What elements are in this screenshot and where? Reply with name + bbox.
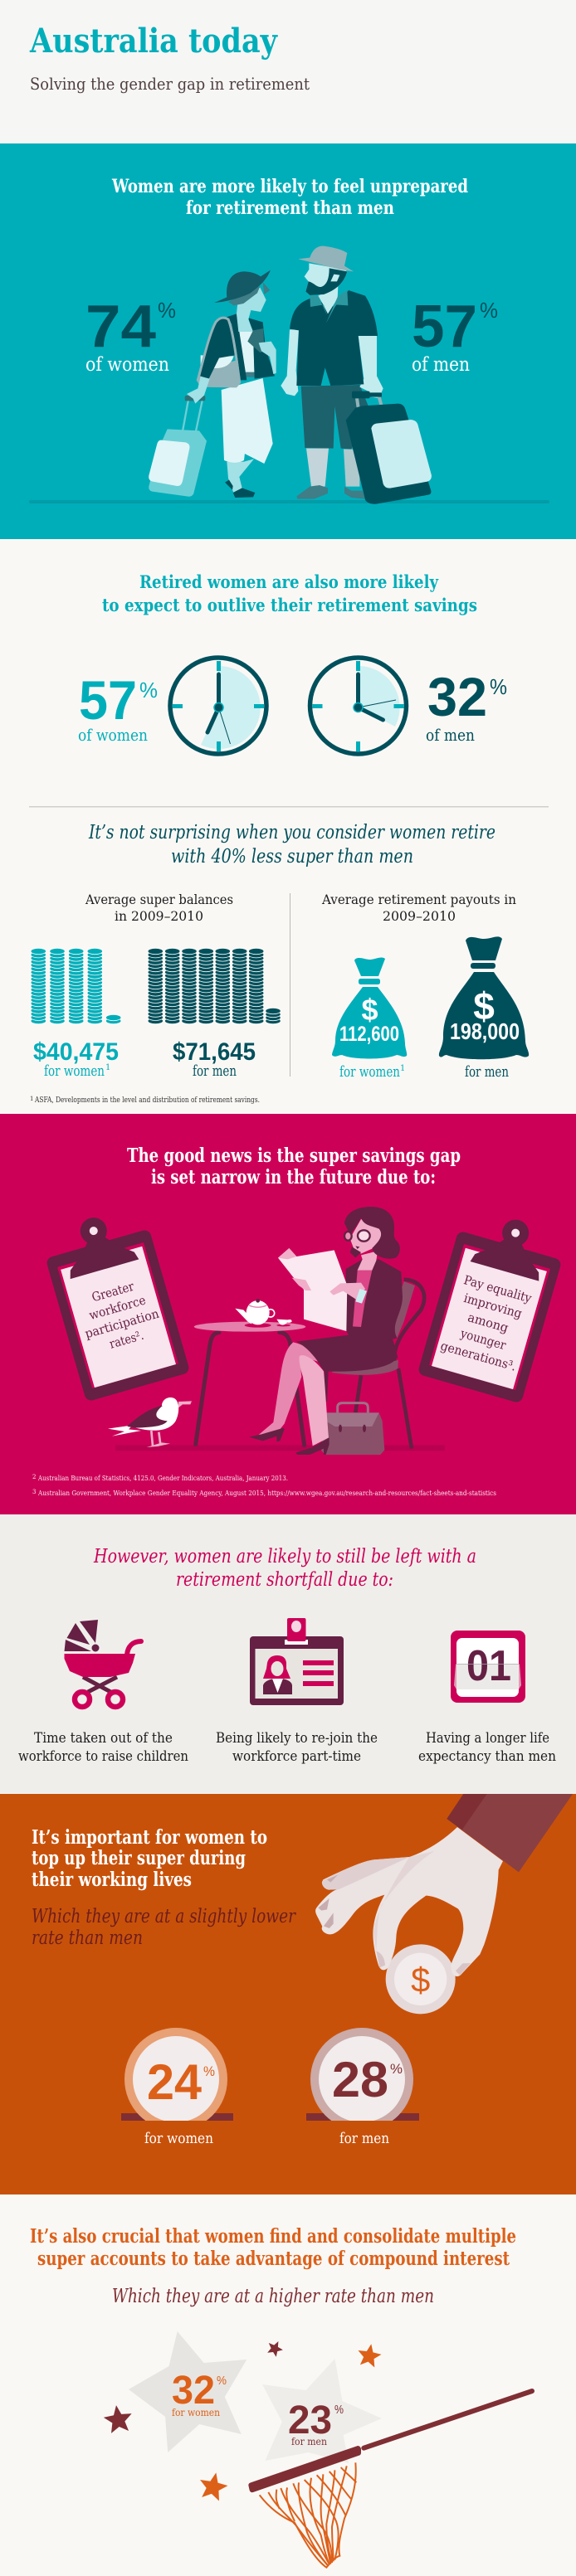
illustration: travelling couple — [149, 246, 432, 504]
heading — [30, 2225, 516, 2270]
money bag: men: 198,000 — [450, 1018, 520, 1044]
icon: ID card — [250, 1618, 344, 1705]
chart title: average super balances: Average super balances — [85, 892, 233, 907]
clipboard text: participation — [83, 1306, 161, 1341]
star: 32% for women: 32 — [172, 2369, 215, 2413]
text: raising children: workforce to raise children — [18, 1748, 188, 1765]
text: life expectancy: expectancy than men — [418, 1748, 556, 1765]
money bag: women — [332, 957, 407, 1058]
heading — [111, 176, 468, 219]
money bag: men — [439, 936, 529, 1059]
footnotes 2 and 3: 3 — [32, 1489, 36, 1495]
heading — [93, 1546, 476, 1591]
clipboard text: rates². — [108, 1328, 145, 1352]
stat: 32% of men — [426, 666, 507, 745]
icon: calendar: 01 — [466, 1642, 511, 1690]
table — [194, 1322, 305, 1446]
heading: It’s important for women to — [32, 1826, 267, 1849]
chart title: average retirement payouts — [321, 892, 516, 924]
text: part-time: Being likely to re-join the — [216, 1730, 378, 1747]
subtitle: Solving the gender gap in retirement — [30, 74, 310, 94]
coin: 28% for men: % — [390, 2061, 403, 2077]
chart title: average super balances — [85, 892, 233, 924]
coin: 24% for women: 24 — [147, 2054, 203, 2110]
man figure — [281, 246, 383, 499]
coin: 28% for men: 28 — [332, 2052, 388, 2107]
stat: 32% of men: % — [490, 674, 507, 699]
stat: $40,475 for women: for women — [44, 1062, 105, 1080]
subheading: rate than men — [32, 1927, 143, 1949]
heading — [102, 571, 477, 615]
stat: 57% of women: of women — [78, 725, 148, 745]
clock: 32% — [310, 658, 407, 754]
coin: 28% for men: for men — [339, 2130, 389, 2147]
clipboard text — [439, 1271, 537, 1374]
coin: 24% for women: % — [203, 2063, 215, 2079]
stat: 74% of women — [85, 294, 176, 376]
stat: 57% of women — [78, 669, 158, 745]
chart title: average retirement payouts: 2009–2010 — [383, 908, 456, 924]
clipboard text: Pay equality — [462, 1272, 534, 1306]
panel: retirement savings clocks — [0, 539, 576, 1114]
footnotes 2 and 3 — [32, 1474, 496, 1498]
icon: pram — [65, 1620, 141, 1707]
heading: is set narrow in the future due to: — [151, 1166, 436, 1188]
clipboard: pay equality — [417, 1205, 569, 1403]
clipboard: workforce participation — [38, 1203, 190, 1402]
ground line — [29, 500, 549, 503]
star: 32% for women: for women — [172, 2407, 220, 2418]
star: 32% for women: % — [217, 2374, 227, 2388]
stat: $40,475 for women: 1 — [105, 1063, 110, 1072]
stat: 57% of men: 57 — [412, 294, 477, 360]
clipboard text: Greater — [90, 1279, 136, 1305]
star: 23% for men — [262, 2359, 382, 2463]
heading: However, women are likely to still be left with a — [93, 1546, 476, 1567]
stat: 57% of men — [412, 294, 498, 376]
money bag: women: 112,600 — [339, 1023, 399, 1046]
woman figure — [187, 270, 276, 498]
star: 23% for men: % — [334, 2403, 344, 2417]
footnote 1: 1 — [30, 1096, 33, 1102]
chart title: average retirement payouts: Average retirement payouts in — [321, 892, 516, 907]
footnotes 2 and 3: 2 — [32, 1474, 36, 1480]
star: 23% for men: 23 — [288, 2399, 332, 2442]
coin stacks: women — [31, 948, 121, 1024]
text: part-time: workforce part-time — [232, 1748, 361, 1765]
panel: good news — [0, 1114, 576, 1514]
heading — [127, 1145, 461, 1188]
footnotes 2 and 3: Australian Bureau of Statistics, 4125.0, Gender Indicators, Australia, January 2013. — [37, 1475, 288, 1483]
stat: 74% of women: % — [158, 298, 176, 323]
heading — [32, 1826, 267, 1891]
heading: 40% less super — [88, 822, 495, 868]
icon: calendar — [451, 1631, 525, 1703]
subheading — [32, 1906, 297, 1949]
stat: 57% of men: % — [480, 298, 498, 323]
chart title: average super balances: in 2009–2010 — [115, 908, 203, 924]
illustration: woman reading at cafe — [108, 1207, 445, 1455]
coin: 24% for women: for women — [144, 2130, 213, 2147]
man's suitcase — [346, 391, 432, 504]
title: Australia today — [29, 22, 279, 61]
stat: $40,475 for women: $40,475 — [33, 1038, 119, 1066]
heading: to expect to outlive their retirement savings — [102, 595, 477, 615]
coin: 24% for women — [121, 2028, 233, 2147]
teapot and cup — [235, 1299, 292, 1328]
subheading: Which they are at a higher rate than men — [112, 2286, 434, 2307]
coin stacks: men — [148, 948, 281, 1024]
panel: header — [0, 0, 576, 143]
clipboard text: improving — [462, 1290, 524, 1321]
clipboard text: workforce — [87, 1292, 148, 1323]
label: for women: 1 — [400, 1064, 405, 1073]
clock: 57% — [170, 658, 266, 754]
panel: consolidate super accounts — [0, 2194, 576, 2576]
woman — [249, 1207, 403, 1455]
star: 32% for women — [129, 2331, 247, 2452]
text: life expectancy — [418, 1730, 556, 1765]
label: for men: for men — [465, 1063, 509, 1081]
stat: 57% of women: 57 — [79, 669, 137, 731]
heading: their working lives — [32, 1869, 192, 1891]
stat: $71,645 for men: for men — [193, 1062, 237, 1080]
panel: retirement shortfall — [0, 1514, 576, 1794]
seagull — [108, 1397, 192, 1447]
text: life expectancy: Having a longer life — [426, 1730, 549, 1747]
money bag: women: $ — [361, 993, 378, 1027]
heading: Women are more likely to feel unprepared — [111, 176, 468, 197]
label: for women: for women — [339, 1063, 400, 1081]
heading: for retirement than men — [186, 197, 394, 219]
stat: 57% of men: of men — [412, 354, 470, 376]
clipboard text — [74, 1274, 165, 1358]
heading: top up their super during — [32, 1847, 246, 1869]
stat: 32% of men: 32 — [427, 666, 487, 727]
chair — [325, 1280, 424, 1449]
text: part-time — [216, 1730, 378, 1765]
heading: 40% less super: It’s not surprising when you consider women retire — [88, 822, 495, 843]
woman's suitcase — [149, 396, 207, 497]
stat: 74% of women: of women — [85, 354, 169, 376]
panel: top up super — [0, 1794, 576, 2194]
small stars — [102, 2340, 383, 2502]
subheading: Which they are at a slightly lower — [32, 1906, 297, 1927]
text: raising children: Time taken out of the — [34, 1730, 173, 1747]
coin: 28% for men — [306, 2028, 419, 2147]
stat: $71,645 for men: $71,645 — [173, 1038, 256, 1066]
illustration: hand holding coin — [315, 1794, 573, 2014]
panel: unprepared for retirement — [0, 143, 576, 539]
money bag: men: $ — [473, 984, 495, 1028]
text: raising children — [18, 1730, 188, 1765]
stat: 32% of men: of men — [426, 725, 475, 745]
stat: 57% of women: % — [139, 678, 158, 702]
stat: $40,475 for women — [33, 1038, 119, 1080]
footnote 1: ASFA, Developments in the level and distribution of retirement savings. — [34, 1096, 260, 1105]
star: 23% for men: for men — [291, 2436, 327, 2447]
illustration: butterfly net — [248, 2391, 532, 2568]
heading: Retired women are also more likely — [139, 571, 439, 592]
stat: $71,645 for men — [173, 1038, 256, 1080]
stat: 74% of women: 74 — [85, 294, 156, 360]
illustration: hand holding coin: $ — [411, 1960, 430, 1999]
clipboard text: among — [466, 1310, 510, 1335]
clipboard text: younger — [458, 1325, 508, 1353]
handbag — [321, 1403, 384, 1455]
heading: 40% less super: with 40% less super than men — [171, 846, 413, 868]
heading: The good news is the super savings gap — [127, 1145, 461, 1167]
clipboard text: generations³. — [439, 1338, 518, 1374]
footnotes 2 and 3: Australian Government, Workplace Gender Equality Agency, August 2015, https://www.wgea.gov.au/research-and-resources/fact-sheets-and-statistics — [37, 1490, 496, 1498]
heading: retirement shortfall due to: — [176, 1569, 393, 1591]
